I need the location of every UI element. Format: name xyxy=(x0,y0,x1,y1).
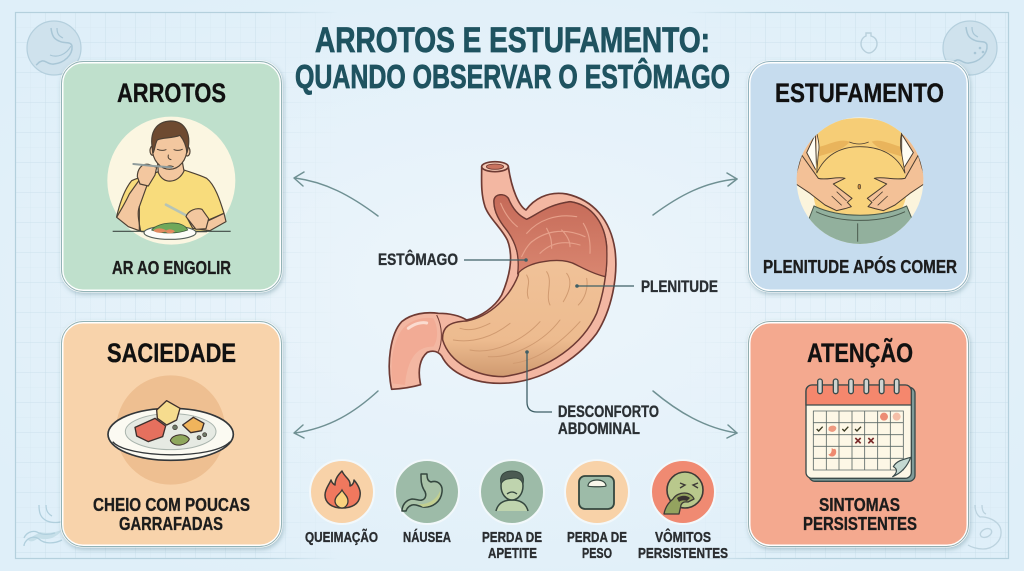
arrow: to atencao xyxy=(653,391,737,438)
arrow: to saciedade xyxy=(294,391,378,438)
icon: perda de apetite xyxy=(480,460,544,524)
arrow: to arrotos xyxy=(294,172,378,216)
watermark: stomach bottom left xyxy=(24,505,63,546)
main title xyxy=(295,21,730,95)
heading: atencao: ATENÇÃO xyxy=(807,337,913,368)
illustration: plate of food xyxy=(108,375,233,485)
label: plenitude xyxy=(575,277,718,296)
heading: saciedade: SACIEDADE xyxy=(107,338,236,368)
caption: sintomas persistentes xyxy=(803,494,917,534)
icon labels: PESO xyxy=(582,546,612,562)
icon labels xyxy=(305,528,728,562)
main title: ARROTOS E ESTUFAMENTO: xyxy=(315,21,710,60)
caption: sintomas persistentes: SINTOMAS xyxy=(819,494,900,515)
icon labels: PERSISTENTES xyxy=(638,546,728,562)
icon labels: NÁUSEA xyxy=(403,529,451,546)
caption: cheio com poucas garrafadas: GARRAFADAS xyxy=(119,513,223,534)
caption: ar ao engolir: AR AO ENGOLIR xyxy=(112,257,231,278)
watermark: stomach top right xyxy=(943,21,997,75)
label: desconforto abdominal xyxy=(525,350,659,438)
arrow: to estufamento xyxy=(653,173,737,215)
panel: saciedade xyxy=(62,322,282,546)
watermark: small organ icon xyxy=(861,33,877,53)
caption: cheio com poucas garrafadas xyxy=(93,494,250,534)
caption: sintomas persistentes: PERSISTENTES xyxy=(803,513,917,534)
main title: QUANDO OBSERVAR O ESTÔMAGO xyxy=(295,57,730,95)
panel: estufamento xyxy=(748,62,968,292)
illustration: bloated belly xyxy=(796,117,924,244)
icon: vomitos persistentes xyxy=(651,460,715,524)
heading: arrotos: ARROTOS xyxy=(117,78,226,108)
label: estomago: ESTÔMAGO xyxy=(378,250,458,269)
stomach illustration xyxy=(389,162,616,389)
icon labels: PERDA DE xyxy=(482,530,542,546)
watermark: stomach bottom right xyxy=(968,505,1001,549)
icon: perda de peso xyxy=(565,460,629,524)
panel: atencao xyxy=(748,322,968,546)
illustration: calendar xyxy=(806,379,915,481)
icon labels: QUEIMAÇÃO xyxy=(305,528,378,546)
label: desconforto abdominal: ABDOMINAL xyxy=(558,419,640,438)
panel: arrotos xyxy=(62,62,282,292)
heading: estufamento: ESTUFAMENTO xyxy=(775,78,944,108)
icon: queimacao xyxy=(310,460,374,524)
icon labels: PERDA DE xyxy=(567,530,627,546)
label: estomago xyxy=(378,250,528,269)
icon labels: APETITE xyxy=(488,546,537,562)
label: desconforto abdominal: DESCONFORTO xyxy=(558,402,659,421)
watermark: stomach top left xyxy=(27,21,81,75)
icon: nausea xyxy=(395,460,459,524)
caption: plenitude: PLENITUDE APÓS COMER xyxy=(763,256,957,277)
icon labels: VÔMITOS xyxy=(655,528,711,546)
label: plenitude: PLENITUDE xyxy=(641,277,718,296)
illustration: man eating xyxy=(107,117,235,245)
caption: cheio com poucas garrafadas: CHEIO COM POUCAS xyxy=(93,494,250,515)
